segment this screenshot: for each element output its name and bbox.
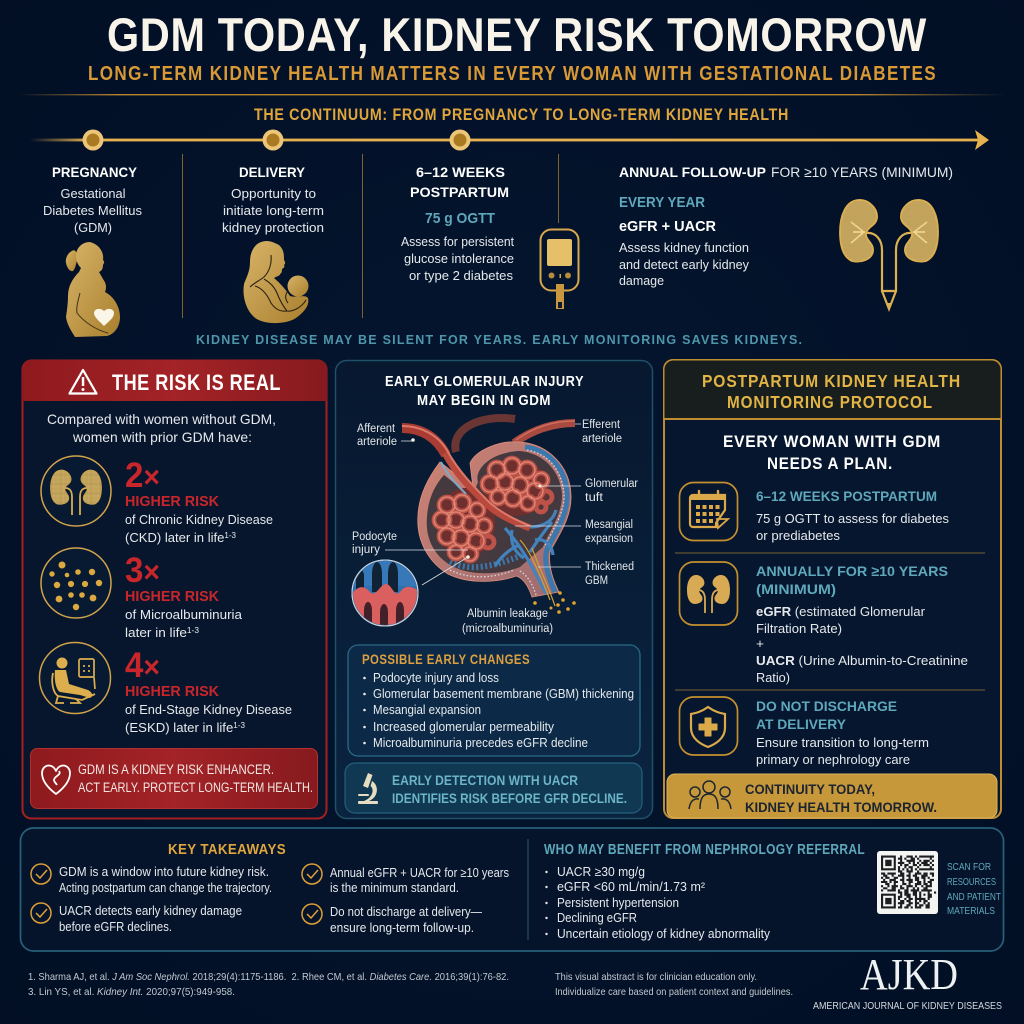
panel: early glomerular injury [336,360,652,818]
panel heading [385,373,584,409]
key takeaways: Do not discharge at delivery— [330,905,482,919]
stat: 3x microalbuminuria [125,551,243,640]
nephrology referral: eGFR <60 mL/min/1.73 m² [557,880,705,894]
stage: 6-12 weeks postpartum: 75 g OGTT [425,210,495,227]
key takeaways: is the minimum standard. [330,881,459,895]
stat: 2x CKD [125,456,273,545]
key takeaways: Annual eGFR + UACR for ≥10 years [330,866,509,880]
nephrology referral: Uncertain etiology of kidney abnormality [557,927,771,941]
key takeaways: GDM is a window into future kidney risk. [59,865,269,879]
disclaimer: This visual abstract is for clinician education only. [555,971,757,983]
stage: pregnancy: Diabetes Mellitus [43,203,142,218]
icon: heart with kidney line [42,765,70,794]
icon: dialysis patient in circle [40,642,110,714]
panel: postpartum monitoring protocol [664,360,1001,818]
vascular tuft [434,458,552,561]
icon: calendar [680,482,738,540]
key takeaways: ensure long-term follow-up. [330,921,474,935]
icon: shield [680,697,738,755]
step: annually [680,562,968,685]
icon: pregnant woman [66,242,120,337]
icon: kidneys in circle [41,456,111,526]
stage: 6-12 weeks postpartum: glucose intolerance [404,251,514,266]
glomerulus callout labels: Albumin leakage [467,608,548,620]
stage: 6-12 weeks postpartum: 6–12 WEEKS [416,164,505,180]
glomerulus callout labels: Glomerular [585,478,638,490]
nephrology referral [544,842,865,941]
box: possible early changes: Microalbuminuria precedes eGFR decline [373,736,588,750]
step: 6-12 weeks [680,482,949,543]
references: 1. Sharma AJ, et al. J Am Soc Nephrol. 2018;29(4):1175-1186. 2. Rhee CM, et al. Diabetes Care. 2016;39(1):76-82. [28,971,509,983]
references: 3. Lin YS, et al. Kidney Int. 2020;97(5):949-958. [28,986,235,998]
step: do not discharge: Ensure transition to long-term [756,735,929,750]
step: do not discharge: primary or nephrology care [756,752,910,767]
step: 6-12 weeks: 6–12 WEEKS POSTPARTUM [756,488,937,504]
glomerulus callout labels: Podocyte [352,531,397,543]
stat: 4x ESKD: (ESKD) later in life [125,720,232,735]
stage: delivery: Opportunity to [231,186,316,201]
key takeaways: Acting postpartum can change the trajectory. [59,881,272,895]
callout: early detection: EARLY DETECTION WITH UACR [392,772,578,788]
panel: takeaways and referral [20,828,1004,951]
box: possible early changes: Podocyte injury and loss [373,671,499,685]
step: annually: (MINIMUM) [756,581,836,597]
step: do not discharge: DO NOT DISCHARGE [756,698,897,714]
silent disease message: KIDNEY DISEASE MAY BE SILENT FOR YEARS. EARLY MONITORING SAVES KIDNEYS. [196,333,802,347]
callout: risk enhancer: ACT EARLY. PROTECT LONG-TERM HEALTH. [78,780,313,795]
callout: early detection: IDENTIFIES RISK BEFORE GFR DECLINE. [392,790,627,806]
protocol tagline [723,432,941,473]
risk intro text [47,411,276,445]
callout: risk enhancer [30,748,318,808]
stage: delivery [222,164,324,323]
stage: 6-12 weeks postpartum: or type 2 diabetes [409,268,513,283]
box: possible early changes [348,645,640,756]
callout: risk enhancer: GDM IS A KIDNEY RISK ENHANCER. [78,762,274,777]
protocol header [664,360,1001,420]
glomerulus callout labels: Thickened [585,561,634,573]
glomerulus illustration [402,418,576,614]
step: 6-12 weeks: 75 g OGTT to assess for diabetes [756,511,949,526]
scan caption: SCAN FOR [947,861,991,873]
stage: annual follow-up: Assess kidney function [619,240,749,255]
nephrology referral: WHO MAY BENEFIT FROM NEPHROLOGY REFERRAL [544,842,865,858]
box: possible early changes: Mesangial expansion [373,703,481,717]
nephrology referral: UACR ≥30 mg/g [557,865,645,879]
stat: 3x microalbuminuria: 3× [125,551,160,590]
stage: 6-12 weeks postpartum [401,164,578,309]
stat: 3x microalbuminuria: 1-3 [187,626,200,635]
journal logo: AJKD [860,950,958,999]
stat: 3x microalbuminuria: later in life [125,625,184,640]
glomerulus callout labels: tuft [585,492,604,504]
stage: delivery: kidney protection [222,220,324,235]
step: 6-12 weeks: or prediabetes [756,528,840,543]
stage: pregnancy [43,164,142,337]
glomerulus callout labels: GBM [585,575,608,587]
callout: continuity: CONTINUITY TODAY, [745,781,875,797]
protocol tagline: EVERY WOMAN WITH GDM [723,432,941,451]
stage: annual follow-up: EVERY YEAR [619,194,705,211]
callout: early detection [345,763,642,813]
glomerulus callout labels: injury [352,544,380,556]
stat: 2x CKD: 1-3 [224,531,237,540]
stat: 3x microalbuminuria: of Microalbuminuria [125,607,243,622]
inset: podocyte foot processes [350,560,420,630]
panel heading: EARLY GLOMERULAR INJURY [385,373,584,390]
icon: checks [31,864,322,924]
stage: delivery: DELIVERY [239,164,306,180]
stage: annual follow-up [619,164,953,309]
stage: pregnancy: PREGNANCY [52,164,138,180]
stat: 3x microalbuminuria: HIGHER RISK [125,588,219,605]
disclaimer [555,971,793,998]
glomerulus callout labels: expansion [585,533,633,545]
step: annually: Ratio) [756,670,790,685]
stage: annual follow-up: damage [619,273,664,288]
references [28,971,509,998]
stat: 4x ESKD [125,646,292,735]
stage: pregnancy: (GDM) [74,220,112,235]
scan caption: RESOURCES [947,876,996,888]
scan caption: AND PATIENT [947,891,1001,903]
stage: annual follow-up: eGFR + UACR [619,218,716,235]
icon: kidneys with ureters [840,200,938,309]
continuum heading: THE CONTINUUM: FROM PREGNANCY TO LONG-TERM KIDNEY HEALTH [254,106,789,124]
key takeaways: KEY TAKEAWAYS [168,841,286,858]
glomerulus callout labels: (microalbuminuria) [462,623,553,635]
step: annually: Filtration Rate) [756,621,842,636]
stage: annual follow-up: FOR ≥10 YEARS (MINIMUM) [771,164,953,180]
nephrology referral: Declining eGFR [557,911,637,925]
protocol header: MONITORING PROTOCOL [727,392,933,412]
icon: kidneys [680,562,738,625]
icon: people [689,781,731,809]
stat: 4x ESKD: 1-3 [233,721,246,730]
step: annually: + [756,636,764,651]
box: possible early changes: Increased glomerular permeability [373,720,555,734]
icon: mother and baby [243,241,308,323]
stage: 6-12 weeks postpartum: Assess for persistent [401,234,514,249]
icon: albumin dots in circle [41,548,111,618]
glomerulus callout labels: arteriole [357,436,397,448]
step: do not discharge: AT DELIVERY [756,716,847,732]
nephrology referral: Persistent hypertension [557,896,679,910]
timeline arrow [30,130,989,150]
box: possible early changes: Glomerular basement membrane (GBM) thickening [373,687,634,701]
panel heading: MAY BEGIN IN GDM [417,392,551,409]
scan caption: MATERIALS [947,905,995,917]
callout: continuity [667,774,997,818]
stat: 2x CKD: (CKD) later in life [125,530,224,545]
key takeaways: before eGFR declines. [59,920,172,934]
risk panel header: THE RISK IS REAL [112,370,281,395]
glomerulus callout labels [352,419,638,635]
step: annually: UACR (Urine Albumin-to-Creatinine [756,653,968,668]
disclaimer: Individualize care based on patient context and guidelines. [555,986,793,998]
stage: annual follow-up: ANNUAL FOLLOW-UP [619,164,766,180]
step: annually: eGFR (estimated Glomerular [756,604,926,619]
stat: 2x CKD: HIGHER RISK [125,493,219,510]
stage: 6-12 weeks postpartum: POSTPARTUM [410,184,509,200]
stage: annual follow-up: and detect early kidney [619,257,749,272]
glomerulus callout labels: Afferent [357,423,396,435]
icon: microscope [358,773,378,804]
key takeaways: UACR detects early kidney damage [59,904,242,918]
risk panel header [22,360,327,401]
step: do not discharge [680,697,929,767]
QR code [877,851,938,914]
stat: 4x ESKD: 4× [125,646,160,685]
protocol tagline: NEEDS A PLAN. [767,454,893,473]
key takeaways [31,841,509,935]
callout: continuity: KIDNEY HEALTH TOMORROW. [745,799,937,815]
protocol header: POSTPARTUM KIDNEY HEALTH [702,371,961,391]
panel: the risk is real [22,360,327,818]
stage: delivery: initiate long-term [223,203,324,218]
stat: 2x CKD: 2× [125,456,160,495]
stat: 4x ESKD: of End-Stage Kidney Disease [125,702,292,717]
icon: glucose meter [540,230,578,309]
stat: 4x ESKD: HIGHER RISK [125,683,219,700]
stage: pregnancy: Gestational [60,186,126,201]
glomerulus callout labels: Mesangial [585,519,633,531]
scan caption [947,861,1001,917]
risk intro text: women with prior GDM have: [72,429,252,445]
box: possible early changes: POSSIBLE EARLY CHANGES [362,652,530,667]
risk intro text: Compared with women without GDM, [47,411,276,427]
stat: 2x CKD: of Chronic Kidney Disease [125,512,273,527]
journal logo [813,950,1002,1012]
title: GDM TODAY, KIDNEY RISK TOMORROW [107,8,927,61]
glomerulus callout labels: arteriole [582,433,622,445]
step: annually: ANNUALLY FOR ≥10 YEARS [756,563,948,579]
glomerulus callout labels: Efferent [582,419,621,431]
